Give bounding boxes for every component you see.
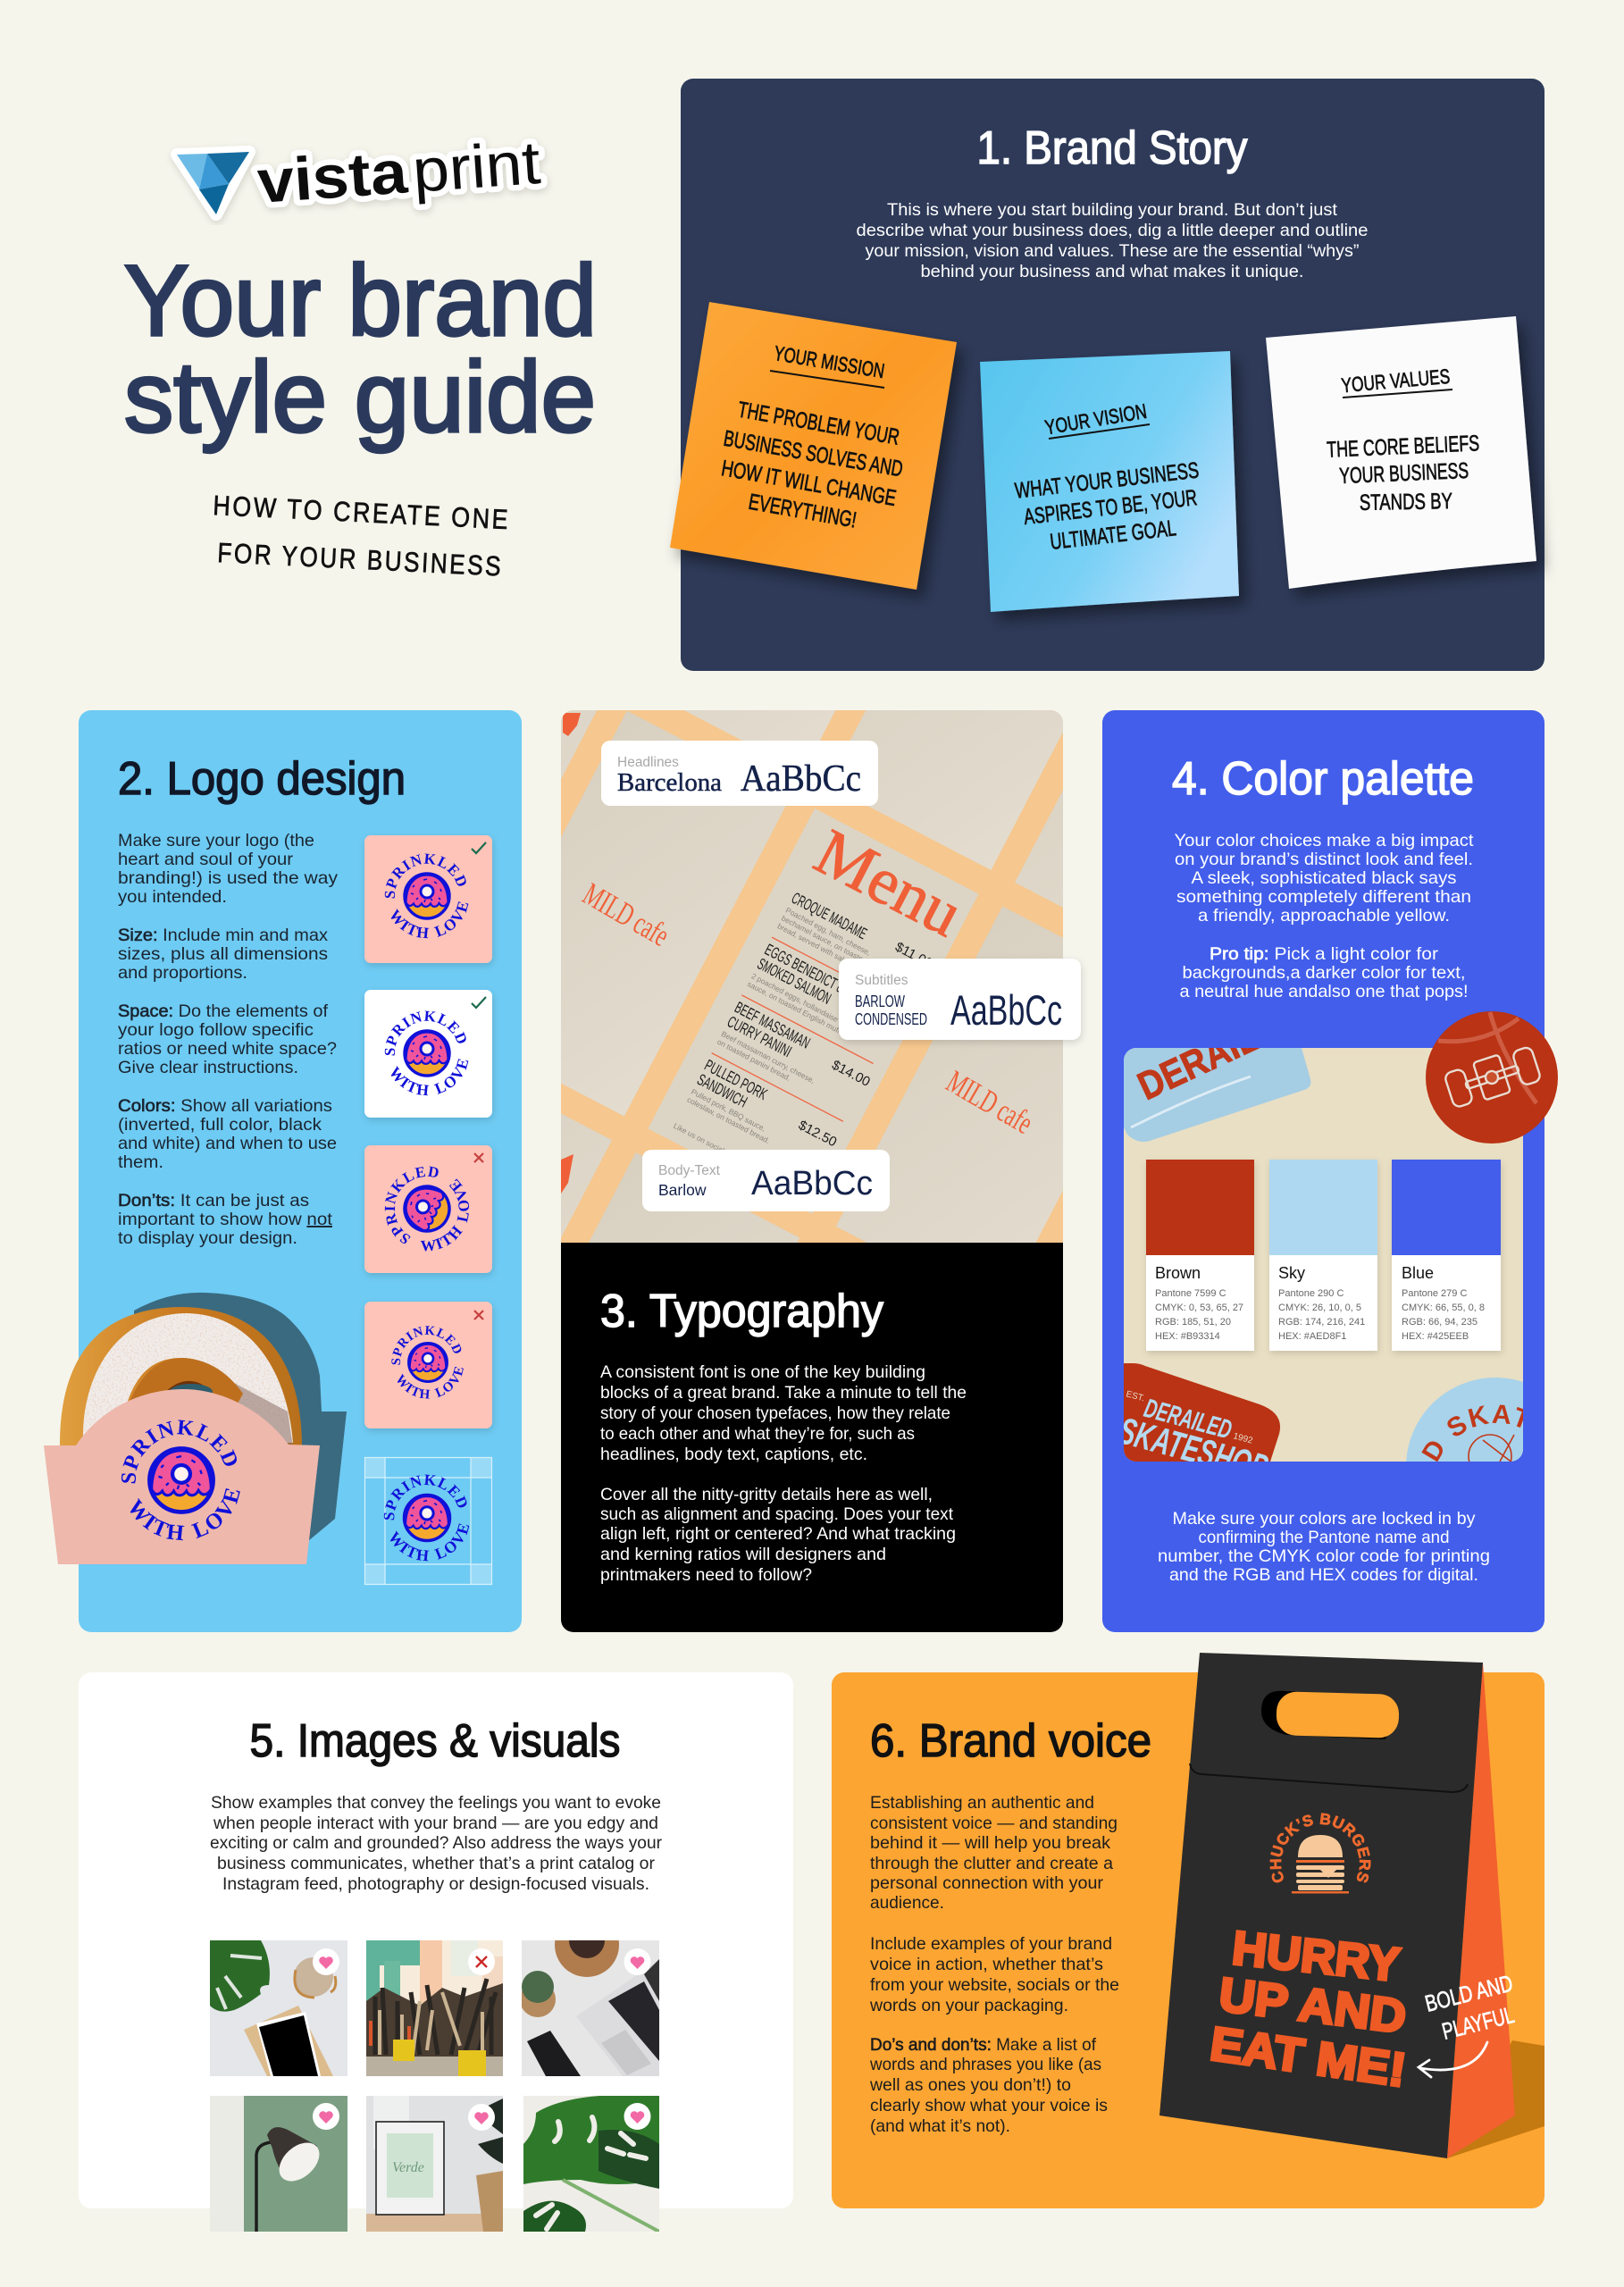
panel: 6. Brand voice [832, 1653, 1544, 2208]
text block: well as ones you don’t!) to [869, 2075, 1071, 2095]
text block: Don’ts: It can be just as [118, 1191, 309, 1211]
photo: laptop desk [522, 1940, 659, 2076]
swatch: brown: CMYK: 0, 53, 65, 27 [1155, 1303, 1243, 1313]
image: menu mockup: CROQUE MADAME [789, 889, 870, 942]
illustration: donut in branded sleeve [44, 1292, 347, 1564]
icon: heart badge [468, 2104, 495, 2131]
text block: personal connection with your [870, 1873, 1103, 1893]
text block: backgrounds,a darker color for text, [1183, 963, 1465, 983]
photo: monstera leaves [523, 2095, 659, 2232]
sticky note: your values: THE CORE BELIEFS [1327, 431, 1480, 463]
logo: vistaprint sticker [177, 129, 542, 216]
logo tile: clear space grid: SPRINKLED [384, 1474, 466, 1520]
sticker: skateshop blue circle [1406, 1378, 1523, 1462]
sticker: skateshop blue circle: ED SKATESHOP [1421, 1404, 1523, 1462]
text block: ratios or need white space? [118, 1039, 337, 1059]
text block: Make sure your logo (the [118, 831, 314, 850]
text block: audience. [870, 1893, 944, 1913]
text block: something completely different than [1176, 887, 1471, 907]
type card: subtitles: AaBbCc [950, 986, 1062, 1034]
photo: framed print and plant [366, 2096, 503, 2232]
image: menu mockup: SANDWICH [694, 1070, 750, 1111]
image: menu mockup: on toasted panini bread. [716, 1037, 792, 1083]
panel: 2. Logo design [44, 710, 522, 1632]
subtitle: HOW TO CREATE ONE [213, 490, 511, 535]
sticky note: your vision: ULTIMATE GOAL [1049, 515, 1177, 555]
image: menu mockup: bread, served with salad. [776, 921, 855, 968]
text block: your logo follow specific [118, 1020, 314, 1040]
text block: (and what it’s not). [870, 2116, 1010, 2136]
heading: 2. Logo design [118, 753, 406, 805]
sticky note: your vision: ASPIRES TO BE, YOUR [1023, 485, 1199, 530]
image: menu mockup: Like us on social [672, 1121, 726, 1155]
text block: Colors: Show all variations [118, 1096, 332, 1116]
swatch: sky [1269, 1160, 1377, 1351]
text block: number, the CMYK color code for printing [1158, 1546, 1490, 1566]
title: Your brand [124, 245, 597, 356]
text block: story of your chosen typefaces, how they relate [600, 1403, 950, 1423]
type card: headlines: AaBbCc [741, 758, 861, 800]
logo tile: small wrong [363, 1302, 496, 1434]
text block: printmakers need to follow? [600, 1565, 812, 1585]
type card: body text: AaBbCc [751, 1165, 873, 1202]
image: menu mockup: coleslaw, on toasted bread. [686, 1095, 772, 1145]
sticky note: your values: YOUR BUSINESS [1339, 458, 1469, 489]
text block: branding!) is used the way [118, 868, 338, 888]
sticker: red truck circle [1426, 1011, 1558, 1144]
bag slogan [1207, 1922, 1409, 2098]
photo: green wall lamp [210, 2096, 347, 2232]
logo tile: rotated wrong: SPRINKLED [384, 1167, 439, 1244]
text block: confirming the Pantone name and [1199, 1528, 1449, 1547]
text block: sizes, plus all dimensions [118, 944, 328, 964]
text block: Size: Include min and max [118, 926, 328, 945]
image: menu mockup [561, 710, 1063, 1243]
MILD cafe marks [577, 875, 1039, 1141]
text block: words and phrases you like (as [869, 2055, 1101, 2074]
text block: exciting or calm and grounded? Also address the ways your [210, 1833, 662, 1853]
MILD cafe marks: MILD cafe [577, 875, 675, 953]
type card: headlines: Headlines [617, 755, 679, 770]
swatch: blue: RGB: 66, 94, 235 [1402, 1317, 1478, 1328]
panel: 3. Typography [561, 710, 1084, 1632]
text block: business communicates, whether that’s a print catalog or [217, 1854, 655, 1873]
text block: A consistent font is one of the key building [600, 1362, 925, 1382]
text block: consistent voice — and standing [870, 1814, 1118, 1833]
bag slogan: UP AND [1217, 1968, 1409, 2044]
text block [600, 1362, 967, 1585]
text block: them. [118, 1152, 163, 1172]
sticky note: your values: YOUR VALUES [1340, 364, 1451, 397]
sticker: skateshop red: EST. [1125, 1389, 1145, 1403]
logo tile: pink correct [363, 835, 496, 968]
icon: check [472, 842, 486, 853]
callout: bold and playful: PLAYFUL [1439, 2001, 1517, 2045]
icon: heart badge [624, 1948, 650, 1975]
text block: A sleek, sophisticated black says [1192, 868, 1457, 888]
icon: heart badge [313, 2103, 339, 2130]
sticky note: your values: STANDS BY [1360, 489, 1452, 515]
image: menu mockup: Beef massaman curry, cheese, [720, 1029, 816, 1085]
sticky note: your mission [670, 302, 957, 590]
text block: important to show how not [118, 1210, 333, 1229]
text block: Instagram feed, photography or design-focused visuals. [222, 1874, 649, 1894]
text block: behind it — will help you break [870, 1833, 1110, 1853]
logo tile: small wrong: SPRINKLED [391, 1326, 461, 1365]
text block: words on your packaging. [869, 1996, 1068, 2015]
sticky note: your mission: YOUR MISSION [773, 341, 886, 382]
text block: Do’s and don’ts: Make a list of [870, 2035, 1097, 2055]
swatch: sky: Pantone 290 C [1278, 1288, 1344, 1299]
text block [118, 831, 338, 1248]
text block: behind your business and what makes it unique. [920, 262, 1304, 281]
image: menu mockup: 2 poached eggs, hollandaise [750, 971, 840, 1024]
image: menu mockup: PULLED PORK [702, 1056, 770, 1103]
sticky note: your vision: YOUR VISION [1043, 399, 1149, 439]
text block [1174, 831, 1474, 1001]
title [124, 245, 597, 453]
heading: 1. Brand Story [977, 122, 1247, 174]
sticky note: your mission: THE PROBLEM YOUR [736, 397, 901, 450]
bag logo: Chuck's Burgers: CHUCK’S BURGERS [1270, 1813, 1371, 1883]
type card: subtitles [839, 959, 1081, 1040]
swatch: blue [1392, 1160, 1501, 1351]
text block: headlines, body text, captions, etc. [600, 1445, 867, 1464]
swatch: brown [1146, 1160, 1254, 1351]
text block: This is where you start building your brand. But don’t just [887, 200, 1338, 220]
type card: body text: Barlow [658, 1181, 707, 1199]
bag slogan: EAT ME! [1207, 2017, 1409, 2098]
text block [856, 200, 1369, 281]
swatch: sky: RGB: 174, 216, 241 [1278, 1317, 1365, 1328]
sticky note: your values [1266, 316, 1536, 589]
text block: such as alignment and spacing. Does your text [600, 1504, 954, 1524]
callout: bold and playful [1419, 1970, 1517, 2077]
text block: to each other and what they’re for, such as [600, 1424, 915, 1444]
subtitle [213, 490, 511, 582]
text block [1158, 1509, 1490, 1585]
sticker: skateshop red [1124, 1363, 1281, 1462]
swatch: brown: HEX: #B93314 [1155, 1331, 1220, 1342]
text block: Include examples of your brand [870, 1934, 1112, 1954]
text block [210, 1793, 662, 1894]
text block: and proportions. [118, 963, 247, 983]
text block: Make sure your colors are locked in by [1172, 1509, 1476, 1529]
text block: blocks of a great brand. Take a minute to tell the [600, 1383, 967, 1403]
text block: Pro tip: Pick a light color for [1210, 944, 1439, 964]
bag slogan: HURRY [1230, 1922, 1402, 1992]
swatch: blue: Pantone 279 C [1402, 1288, 1467, 1299]
text block: your mission, vision and values. These are the essential “whys” [865, 241, 1360, 261]
menu text: Menu [804, 816, 974, 951]
text block: voice in action, whether that’s [870, 1955, 1103, 1974]
sticky note: your vision: WHAT YOUR BUSINESS [1014, 457, 1201, 504]
swatch: blue: CMYK: 66, 55, 0, 8 [1402, 1303, 1485, 1313]
logo tile: pink correct: SPRINKLED [384, 854, 466, 899]
icon: vistaprint V mark [177, 152, 249, 214]
logo tile: small wrong: WITH LOVE [397, 1367, 464, 1399]
text block: on your brand’s distinct look and feel. [1175, 850, 1473, 869]
logo tile: pink correct: WITH LOVE [391, 901, 468, 938]
text block: Establishing an authentic and [870, 1793, 1094, 1813]
text block: a neutral hue andalso one that pops! [1179, 982, 1469, 1001]
photo: leaf and tablet [210, 1940, 347, 2076]
sticker: skateshop red: DERAILED [1141, 1394, 1235, 1445]
logo tile: white correct [363, 990, 496, 1123]
icon: heart badge [624, 2103, 650, 2130]
text block: heart and soul of your [118, 850, 294, 869]
type card: body text [642, 1150, 890, 1211]
text block: to display your design. [118, 1228, 297, 1248]
icon: cross badge [468, 1948, 495, 1975]
swatch: brown: RGB: 185, 51, 20 [1155, 1317, 1231, 1328]
text block: describe what your business does, dig a little deeper and outline [856, 221, 1369, 240]
logo tile: clear space grid: WITH LOVE [389, 1524, 470, 1562]
photo: framed print and plant: Verde [392, 2160, 424, 2175]
heading: 6. Brand voice [870, 1715, 1151, 1767]
text block: and the RGB and HEX codes for digital. [1169, 1565, 1478, 1585]
text block: clearly show what your voice is [870, 2096, 1108, 2115]
wordmark: vistaprint [255, 129, 542, 216]
text block: Give clear instructions. [118, 1058, 298, 1077]
image: menu mockup: $14.00 [829, 1058, 873, 1090]
text block: and kerning ratios will designers and [600, 1545, 886, 1564]
sticker: skateshop red: 1992 [1232, 1431, 1254, 1446]
type card: body text: Body-Text [658, 1163, 721, 1178]
text block: Cover all the nitty-gritty details here as well, [600, 1485, 933, 1504]
image: menu mockup: CURRY PANINI [724, 1012, 794, 1060]
illustration: burger bag [1159, 1653, 1544, 2158]
sticky note: your mission: EVERYTHING! [747, 490, 858, 533]
sticker: derailed blue: DERAILED [1132, 995, 1308, 1109]
type card: subtitles: CONDENSED [855, 1010, 927, 1028]
text block: you intended. [118, 887, 227, 907]
text block [869, 1793, 1119, 2136]
image: menu mockup: BEEF MASSAMAN [732, 998, 813, 1052]
text block: Your color choices make a big impact [1174, 831, 1474, 850]
image: menu mockup: $12.50 [796, 1118, 839, 1150]
icon: check [472, 997, 486, 1008]
swatch: brown: Brown [1155, 1264, 1201, 1282]
sticker: skateshop red: SKATESHOP [1115, 1409, 1273, 1489]
logo tile: rotated wrong [363, 1145, 496, 1278]
title: style guide [124, 341, 596, 453]
sticky note: your vision [980, 351, 1239, 612]
sticky note: your mission: HOW IT WILL CHANGE [719, 456, 898, 511]
swatch: blue: HEX: #425EEB [1402, 1331, 1469, 1342]
illustration: donut in branded sleeve: WITH LOVE [130, 1488, 240, 1540]
sticky note: your mission: BUSINESS SOLVES AND [722, 426, 905, 482]
icon: cross [474, 1153, 483, 1162]
sticker: derailed blue [1124, 1048, 1311, 1142]
image: menu mockup: $11.00 [892, 939, 935, 971]
type card: subtitles: BARLOW [855, 993, 905, 1010]
MILD cafe marks: MILD cafe [941, 1063, 1039, 1141]
text block: from your website, socials or the [870, 1975, 1119, 1995]
icon: cross [474, 1311, 483, 1319]
image: paper with stickers [1124, 1011, 1558, 1462]
type card: headlines [601, 741, 878, 806]
image: menu mockup: bechamel sauce, on toasted [780, 914, 868, 966]
heading: 5. Images & visuals [250, 1715, 620, 1767]
type card: subtitles: Subtitles [855, 973, 908, 988]
swatch: sky: HEX: #AED8F1 [1278, 1331, 1346, 1342]
image: menu mockup: Pulled pork, BBQ sauce, [690, 1087, 767, 1133]
sleeve [44, 1389, 320, 1564]
panel: 4. Color palette [1102, 710, 1558, 1632]
text block: (inverted, full color, black [118, 1115, 322, 1135]
type card: headlines: Barcelona [617, 769, 723, 797]
panel: 1. Brand Story [670, 79, 1544, 671]
image: menu mockup: EGGS BENEDICT & [762, 941, 848, 997]
text block: when people interact with your brand — are you edgy and [213, 1814, 658, 1833]
icon: heart badge [313, 1948, 339, 1975]
swatch: brown: Pantone 7599 C [1155, 1288, 1226, 1299]
text block: and white) and when to use [118, 1134, 337, 1153]
text block: Space: Do the elements of [118, 1001, 329, 1021]
logo tile: white correct: SPRINKLED [384, 1011, 466, 1056]
swatch: sky: Sky [1278, 1264, 1305, 1282]
panel: 5. Images & visuals [79, 1672, 793, 2232]
logo tile: rotated wrong: WITH LOVE [420, 1179, 470, 1251]
text block: through the clutter and create a [870, 1854, 1113, 1873]
text block: a friendly, approachable yellow. [1198, 906, 1450, 926]
logo tile: white correct: WITH LOVE [391, 1059, 468, 1095]
subtitle: FOR YOUR BUSINESS [217, 537, 504, 582]
photo: paint brushes [366, 1940, 503, 2076]
illustration: donut in branded sleeve: SPRINKLED [121, 1420, 237, 1483]
callout: bold and playful: BOLD AND [1422, 1970, 1515, 2017]
arrow [1419, 2042, 1487, 2077]
heading: 3. Typography [600, 1286, 883, 1337]
image: menu mockup: SMOKED SALMON [755, 955, 834, 1008]
logo tile: clear space grid [364, 1456, 493, 1585]
image: menu mockup: sauce, on toasted English muffin. [746, 979, 849, 1039]
swatch: sky: CMYK: 26, 10, 0, 5 [1278, 1303, 1361, 1313]
black text area [561, 1243, 1063, 1632]
heading: 4. Color palette [1172, 753, 1474, 805]
swatch: blue: Blue [1402, 1264, 1434, 1282]
image: menu mockup: Poached egg, ham, cheese, [784, 906, 872, 957]
text block: align left, right or centered? And what tracking [600, 1524, 956, 1544]
text block: Show examples that convey the feelings you want to evoke [211, 1793, 661, 1813]
